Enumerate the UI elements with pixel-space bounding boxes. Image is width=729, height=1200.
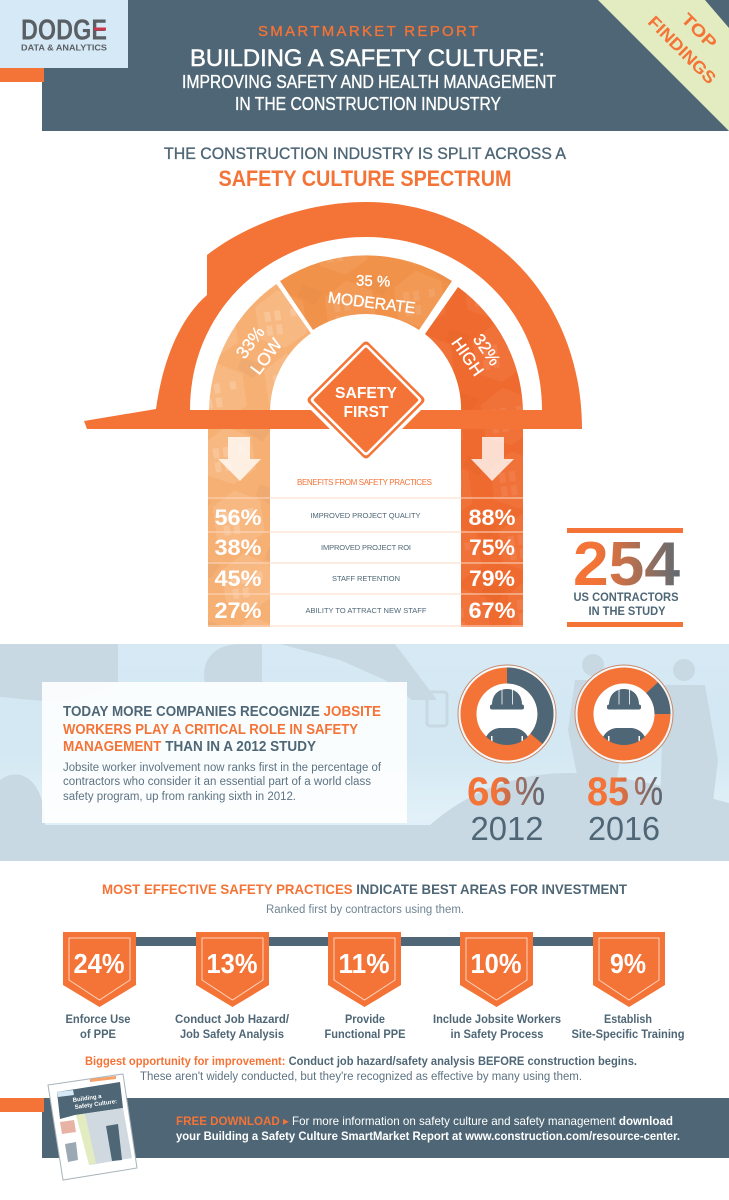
donut chart: 2012 66% (458, 665, 556, 847)
spectrum heading: THE CONSTRUCTION INDUSTRY IS SPLIT ACROSS A (164, 144, 567, 163)
practices heading (102, 881, 627, 916)
text panel: jobsite workers: TODAY MORE COMPANIES RECOGNIZE JOBSITE (63, 704, 381, 720)
stat: 254 US contractors: US CONTRACTORS (574, 592, 679, 604)
badge: 9% site-specific training: 9% (610, 948, 646, 979)
donut chart: 2016 85%: 85 (587, 770, 629, 814)
orange footer tab (0, 1098, 44, 1112)
badge: 9% site-specific training: Site-Specific Training (572, 1029, 684, 1041)
badge: 10% include jobsite workers: 10% (470, 948, 522, 979)
free download text: FREE DOWNLOAD ▸ For more information on safety culture and safety management download (176, 1114, 673, 1128)
badge: 13% job hazard analysis: 13% (206, 948, 258, 979)
report title: IMPROVING SAFETY AND HEALTH MANAGEMENT (182, 72, 556, 92)
top findings ribbon: FINDINGS (644, 12, 720, 88)
donut chart: 2012 66%: % (515, 770, 545, 814)
benefits table: IMPROVED PROJECT ROI (321, 543, 411, 552)
report cover thumbnail: Safety Culture: (74, 1099, 118, 1111)
donut chart: 2012 66%: 66 (467, 770, 512, 814)
benefits table: 38% (214, 535, 262, 560)
safety first sign: FIRST (344, 404, 389, 421)
badge: 9% site-specific training (572, 932, 684, 1041)
benefits table: IMPROVED PROJECT QUALITY (310, 511, 420, 520)
jobsite photo band (0, 644, 729, 861)
arrow: high column (471, 437, 514, 481)
logo: Dodge Data & Analytics (0, 0, 128, 68)
benefits table: ABILITY TO ATTRACT NEW STAFF (306, 606, 427, 615)
benefits table: STAFF RETENTION (332, 574, 400, 583)
orange tab (0, 68, 44, 82)
spectrum segment: low 33%: LOW (246, 334, 286, 378)
badge: 24% enforce use of PPE: Enforce Use (66, 1014, 130, 1026)
badge: 13% job hazard analysis: Job Safety Analysis (180, 1029, 284, 1041)
spectrum segment: moderate 35%: 35 % (356, 272, 391, 291)
benefits table: 27% (214, 598, 262, 623)
arrow: low column (218, 437, 261, 481)
text panel: jobsite workers: WORKERS PLAY A CRITICAL ROLE IN SAFETY (63, 722, 358, 738)
safety first sign: SAFETY (335, 385, 397, 402)
report title: BUILDING A SAFETY CULTURE: (190, 45, 545, 72)
badge: 13% job hazard analysis: Conduct Job Hazard/ (175, 1014, 290, 1026)
free download text (176, 1114, 680, 1143)
opportunity note: These aren't widely conducted, but they're recognized as effective by many using them. (140, 1071, 582, 1083)
badge: 24% enforce use of PPE: 24% (74, 948, 125, 979)
stat: 254 US contractors: 254 (573, 530, 681, 599)
top findings ribbon: TOP (677, 10, 720, 53)
header band (42, 0, 729, 131)
spectrum segment: high 32%: HIGH (448, 334, 487, 380)
badge: 10% include jobsite workers: in Safety Process (450, 1029, 544, 1041)
donut chart: 2016 85%: 2016 (588, 810, 660, 847)
badge: 11% functional PPE (324, 932, 406, 1041)
badge: 10% include jobsite workers: Include Jobsite Workers (433, 1014, 561, 1026)
stat: 254 US contractors (567, 528, 683, 627)
spectrum segment: low 33% (208, 284, 311, 627)
spectrum heading (164, 144, 567, 191)
opportunity note (85, 1056, 637, 1083)
hard hat outline (84, 202, 582, 429)
donut chart: 2012 66%: 2012 (470, 810, 544, 847)
benefits table: 75% (469, 535, 515, 560)
footer band (42, 1098, 729, 1158)
top findings ribbon (598, 0, 729, 131)
benefits table: 88% (468, 505, 516, 530)
logo: Dodge Data & Analytics: DODGE (21, 14, 107, 46)
badge: 9% site-specific training: Establish (604, 1014, 652, 1026)
safety first sign (301, 335, 431, 465)
badge: 11% functional PPE: Provide (345, 1014, 385, 1026)
benefits table: 67% (468, 598, 516, 623)
report title: SMARTMARKET REPORT (258, 23, 478, 40)
donut chart: 2016 85%: % (634, 770, 663, 814)
badge: 24% enforce use of PPE: of PPE (80, 1029, 116, 1041)
spectrum segment: moderate 35% (280, 255, 452, 330)
benefits table: 45% (214, 566, 262, 591)
text panel: jobsite workers (42, 682, 407, 823)
practices heading: MOST EFFECTIVE SAFETY PRACTICES INDICATE BEST AREAS FOR INVESTMENT (102, 881, 627, 897)
text panel: jobsite workers: safety program, up from ranking sixth in 2012. (63, 791, 296, 803)
spectrum segment: low 33%: 33% (232, 322, 269, 362)
spectrum segment: moderate 35%: MODERATE (327, 290, 416, 317)
connector bar (136, 937, 593, 946)
donut chart: 2016 85% (575, 665, 673, 847)
benefits table (208, 478, 523, 626)
benefits table: BENEFITS FROM SAFETY PRACTICES (297, 478, 432, 487)
text panel: jobsite workers: contractors who consider it an essential part of a world class (63, 776, 371, 788)
spectrum segment: high 32% (425, 287, 523, 627)
benefits table: 56% (214, 505, 262, 530)
badge: 11% functional PPE: 11% (338, 948, 390, 979)
logo: Dodge Data & Analytics: DATA & ANALYTICS (21, 42, 107, 52)
spectrum heading: SAFETY CULTURE SPECTRUM (218, 166, 512, 191)
report cover thumbnail (48, 1074, 137, 1180)
report cover thumbnail: Building a (72, 1094, 103, 1104)
benefits table: 79% (469, 566, 515, 591)
badge: 11% functional PPE: Functional PPE (324, 1029, 406, 1041)
report title: IN THE CONSTRUCTION INDUSTRY (235, 94, 501, 114)
badge: 10% include jobsite workers (433, 932, 561, 1041)
stat: 254 US contractors: IN THE STUDY (588, 606, 666, 618)
practices heading: Ranked first by contractors using them. (266, 904, 464, 916)
text panel: jobsite workers: MANAGEMENT THAN IN A 2012 STUDY (63, 739, 316, 755)
badge: 24% enforce use of PPE (63, 932, 136, 1041)
report title (182, 23, 556, 114)
badge: 13% job hazard analysis (175, 932, 290, 1041)
opportunity note: Biggest opportunity for improvement: Conduct job hazard/safety analysis BEFORE construction begins. (85, 1056, 637, 1068)
free download text: your Building a Safety Culture SmartMarket Report at www.construction.com/resource-center. (176, 1129, 680, 1143)
text panel: jobsite workers: Jobsite worker involvement now ranks first in the percentage of (63, 762, 382, 774)
spectrum segment: high 32%: 32% (469, 330, 504, 369)
